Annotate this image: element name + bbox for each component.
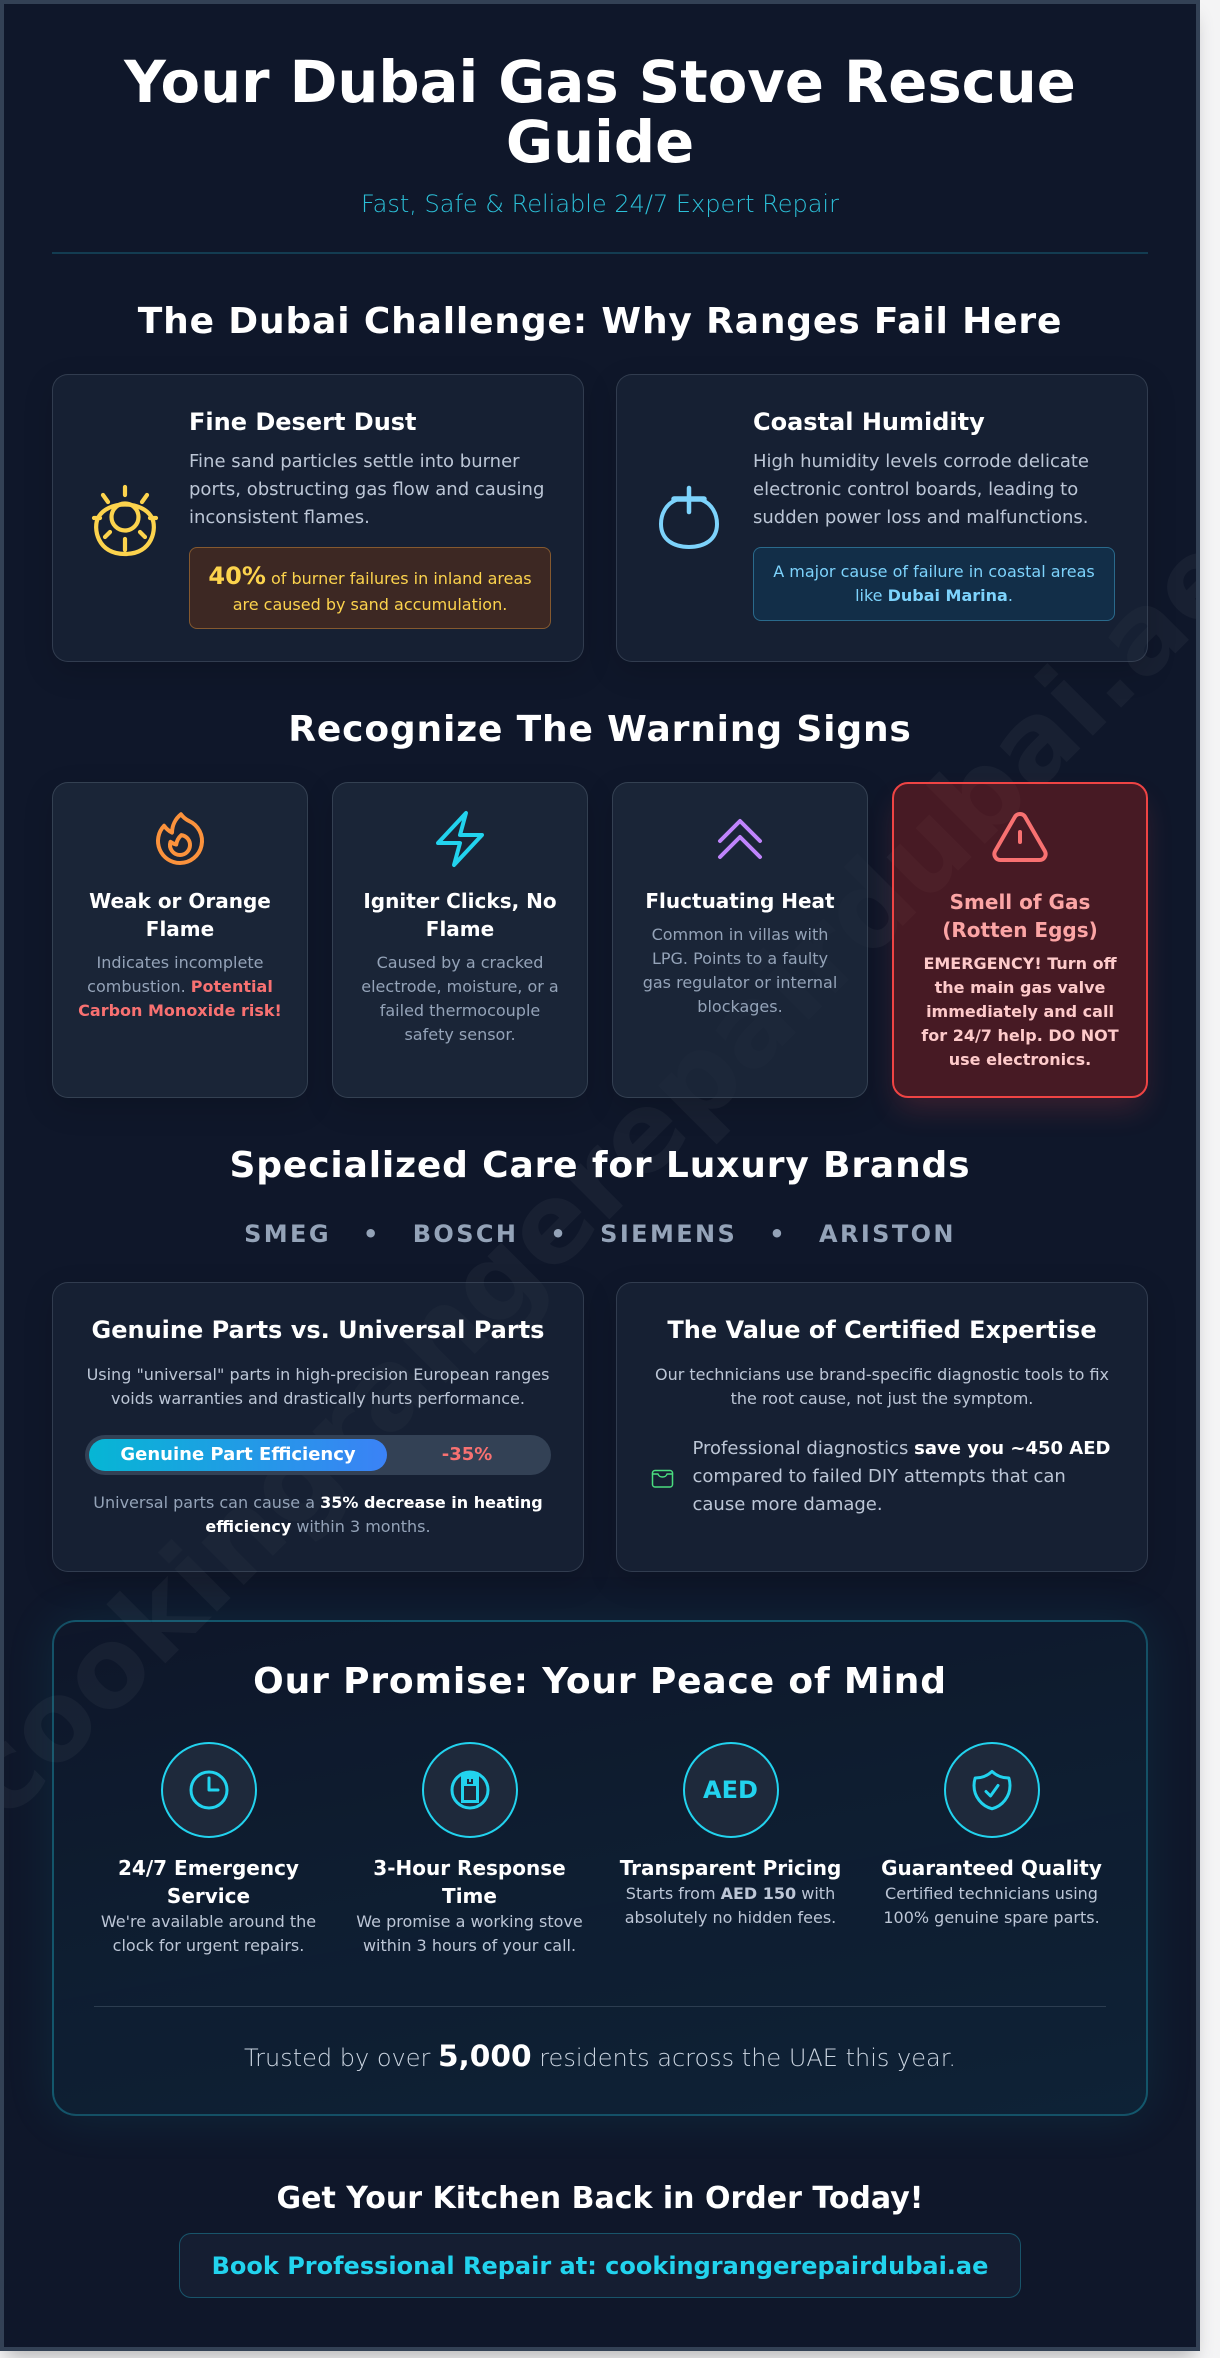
panel: smell of gas: [892, 782, 1148, 1098]
panel: smell of gas: immediately and call: [926, 1002, 1114, 1021]
bar chart: efficiency: [85, 1435, 551, 1475]
promise: 24/7 service: Service: [167, 1884, 250, 1908]
promise: guaranteed quality: 100% genuine spare parts.: [883, 1908, 1100, 1927]
panel: fluctuating heat: Common in villas with: [652, 925, 828, 944]
text: fine desert dust: inconsistent flames.: [189, 507, 370, 528]
panel: our promise: [52, 1620, 1148, 2116]
panel: igniter clicks: failed thermocouple: [380, 1001, 540, 1020]
heading: warning signs: Recognize The Warning Signs: [288, 709, 912, 750]
title: Your Dubai Gas Stove Rescue: [124, 49, 1076, 116]
brand list: SIEMENS: [600, 1220, 737, 1248]
text: fine desert dust: Fine Desert Dust: [189, 408, 417, 436]
heading: the Dubai challenge: The Dubai Challenge: Why Ranges Fail Here: [138, 301, 1062, 342]
savings row: Professional diagnostics save you ~450 AED: [692, 1438, 1110, 1459]
callout: 40%: 40% of burner failures in inland areas: [208, 562, 532, 590]
panel: fluctuating heat: LPG. Points to a faulty: [652, 949, 828, 968]
trust line: Trusted by over 5,000 residents across the UAE this year.: [244, 2039, 956, 2073]
icon: humidity: [659, 486, 719, 549]
panel: fluctuating heat: blockages.: [697, 997, 783, 1016]
promise: 24/7 service: clock for urgent repairs.: [113, 1936, 304, 1955]
panel: genuine vs universal parts: [52, 1282, 584, 1572]
bar chart: efficiency: Genuine Part Efficiency: [120, 1444, 356, 1465]
savings row: compared to failed DIY attempts that can: [692, 1466, 1066, 1487]
text: coastal humidity: sudden power loss and malfunctions.: [753, 507, 1088, 528]
panel: certified expertise: the root cause, not just the symptom.: [731, 1388, 1033, 1408]
heading: luxury brands: Specialized Care for Luxury Brands: [230, 1145, 970, 1186]
icon: flame: [156, 812, 204, 865]
text: fine desert dust: ports, obstructing gas flow and causing: [189, 479, 544, 500]
panel: fluctuating heat: Fluctuating Heat: [645, 889, 835, 913]
call to action heading: Get Your Kitchen Back in Order Today!: [277, 2181, 923, 2216]
panel: smell of gas: EMERGENCY! Turn off: [923, 954, 1117, 973]
icon: shield check: [944, 1742, 1040, 1838]
panel: weak or orange flame: [52, 782, 308, 1098]
panel: igniter clicks: safety sensor.: [404, 1025, 516, 1044]
panel: fluctuating heat: gas regulator or internal: [643, 973, 837, 992]
promise: 24/7 service: 24/7 Emergency: [118, 1856, 299, 1880]
panel: weak or orange flame: Flame: [146, 917, 214, 941]
icon: dust: [92, 484, 158, 556]
panel: certified expertise: The Value of Certified Expertise: [667, 1316, 1097, 1344]
panel: weak or orange flame: combustion. Potential: [87, 977, 273, 996]
savings row: cause more damage.: [692, 1494, 883, 1515]
icon: clock: [160, 1742, 256, 1838]
panel: coastal humidity: [616, 374, 1148, 662]
promise: guaranteed quality: [881, 1742, 1102, 1927]
panel: certified expertise: [616, 1282, 1148, 1572]
panel: weak or orange flame: Weak or Orange: [89, 889, 271, 913]
promise: response time: 3-Hour Response: [373, 1856, 566, 1880]
icon: bolt: [436, 810, 484, 868]
text: coastal humidity: High humidity levels corrode delicate: [753, 451, 1089, 472]
panel: igniter clicks: Caused by a cracked: [377, 953, 543, 972]
brand list: •: [550, 1220, 568, 1248]
icon: AED badge: AED: [703, 1776, 758, 1804]
promise: transparent pricing: absolutely no hidden fees.: [625, 1908, 836, 1927]
panel: smell of gas: Smell of Gas: [950, 890, 1090, 914]
brand list: SMEG: [244, 1220, 331, 1248]
brand list: •: [363, 1220, 381, 1248]
promise: transparent pricing: Transparent Pricing: [620, 1856, 841, 1880]
panel: weak or orange flame: Indicates incomplete: [97, 953, 263, 972]
call to action button: [179, 2233, 1021, 2298]
brand list: [244, 1220, 956, 1248]
promise: response time: within 3 hours of your call.: [363, 1936, 576, 1955]
panel: smell of gas: for 24/7 help. DO NOT: [921, 1026, 1119, 1045]
panel: igniter clicks: Igniter Clicks, No: [363, 889, 557, 913]
panel: certified expertise: Our technicians use brand-specific diagnostic tools to fix: [655, 1364, 1109, 1384]
text: fine desert dust: [189, 408, 551, 629]
icon: response timer: [422, 1742, 518, 1838]
callout: 40%: are caused by sand accumulation.: [233, 595, 507, 614]
brand list: ARISTON: [819, 1220, 956, 1248]
call to action button: Book Professional Repair at: cookingrangerepairdubai.ae: [212, 2252, 988, 2280]
heading: our promise: Our Promise: Your Peace of Mind: [253, 1661, 947, 1702]
bar chart: efficiency: -35%: [442, 1444, 492, 1465]
panel: fine desert dust: [52, 374, 584, 662]
text: coastal humidity: electronic control boards, leading to: [753, 479, 1078, 500]
callout: Dubai Marina: like Dubai Marina.: [855, 586, 1013, 605]
text: coastal humidity: Coastal Humidity: [753, 408, 985, 436]
panel: weak or orange flame: Carbon Monoxide risk!: [78, 1001, 282, 1020]
panel: smell of gas: use electronics.: [949, 1050, 1091, 1069]
callout: Dubai Marina: [753, 547, 1115, 621]
promise: response time: We promise a working stove: [356, 1912, 583, 1931]
panel: genuine vs universal parts: voids warranties and drastically hurts performance.: [111, 1388, 525, 1408]
text: fine desert dust: Fine sand particles settle into burner: [189, 451, 520, 472]
promise: response time: [356, 1742, 583, 1955]
promise: guaranteed quality: Certified technicians using: [885, 1884, 1098, 1903]
panel: genuine vs universal parts: Universal parts can cause a 35% decrease in heating: [93, 1493, 543, 1512]
promise: guaranteed quality: Guaranteed Quality: [881, 1856, 1102, 1880]
promise: response time: Time: [442, 1884, 497, 1908]
promise: transparent pricing: Starts from AED 150 with: [626, 1884, 835, 1903]
promise: 24/7 service: [101, 1742, 316, 1955]
brand list: BOSCH: [413, 1220, 518, 1248]
panel: igniter clicks: [332, 782, 588, 1098]
panel: igniter clicks: electrode, moisture, or a: [361, 977, 559, 996]
savings row: [652, 1438, 1110, 1515]
panel: genuine vs universal parts: Using "universal" parts in high-precision European ranges: [87, 1364, 549, 1384]
panel: genuine vs universal parts: efficiency within 3 months.: [205, 1517, 431, 1536]
panel: smell of gas: (Rotten Eggs): [942, 918, 1098, 942]
title: [124, 49, 1076, 176]
panel: smell of gas: the main gas valve: [935, 978, 1105, 997]
icon: double chevron: [718, 818, 762, 860]
promise: transparent pricing: [620, 1742, 841, 1927]
panel: fluctuating heat: [612, 782, 868, 1098]
icon: savings wallet: [652, 1470, 674, 1488]
brand list: •: [769, 1220, 787, 1248]
panel: igniter clicks: Flame: [426, 917, 494, 941]
panel: genuine vs universal parts: Genuine Parts vs. Universal Parts: [92, 1316, 544, 1344]
callout: Dubai Marina: A major cause of failure in coastal areas: [773, 562, 1095, 581]
icon: warning triangle: [992, 812, 1048, 862]
promise: 24/7 service: We're available around the: [101, 1912, 316, 1931]
text: coastal humidity: [753, 408, 1115, 621]
callout: 40%: [189, 547, 551, 629]
subtitle: Fast, Safe & Reliable 24/7 Expert Repair: [361, 190, 839, 218]
icon: AED badge: [682, 1742, 778, 1838]
title: Guide: [506, 109, 694, 176]
